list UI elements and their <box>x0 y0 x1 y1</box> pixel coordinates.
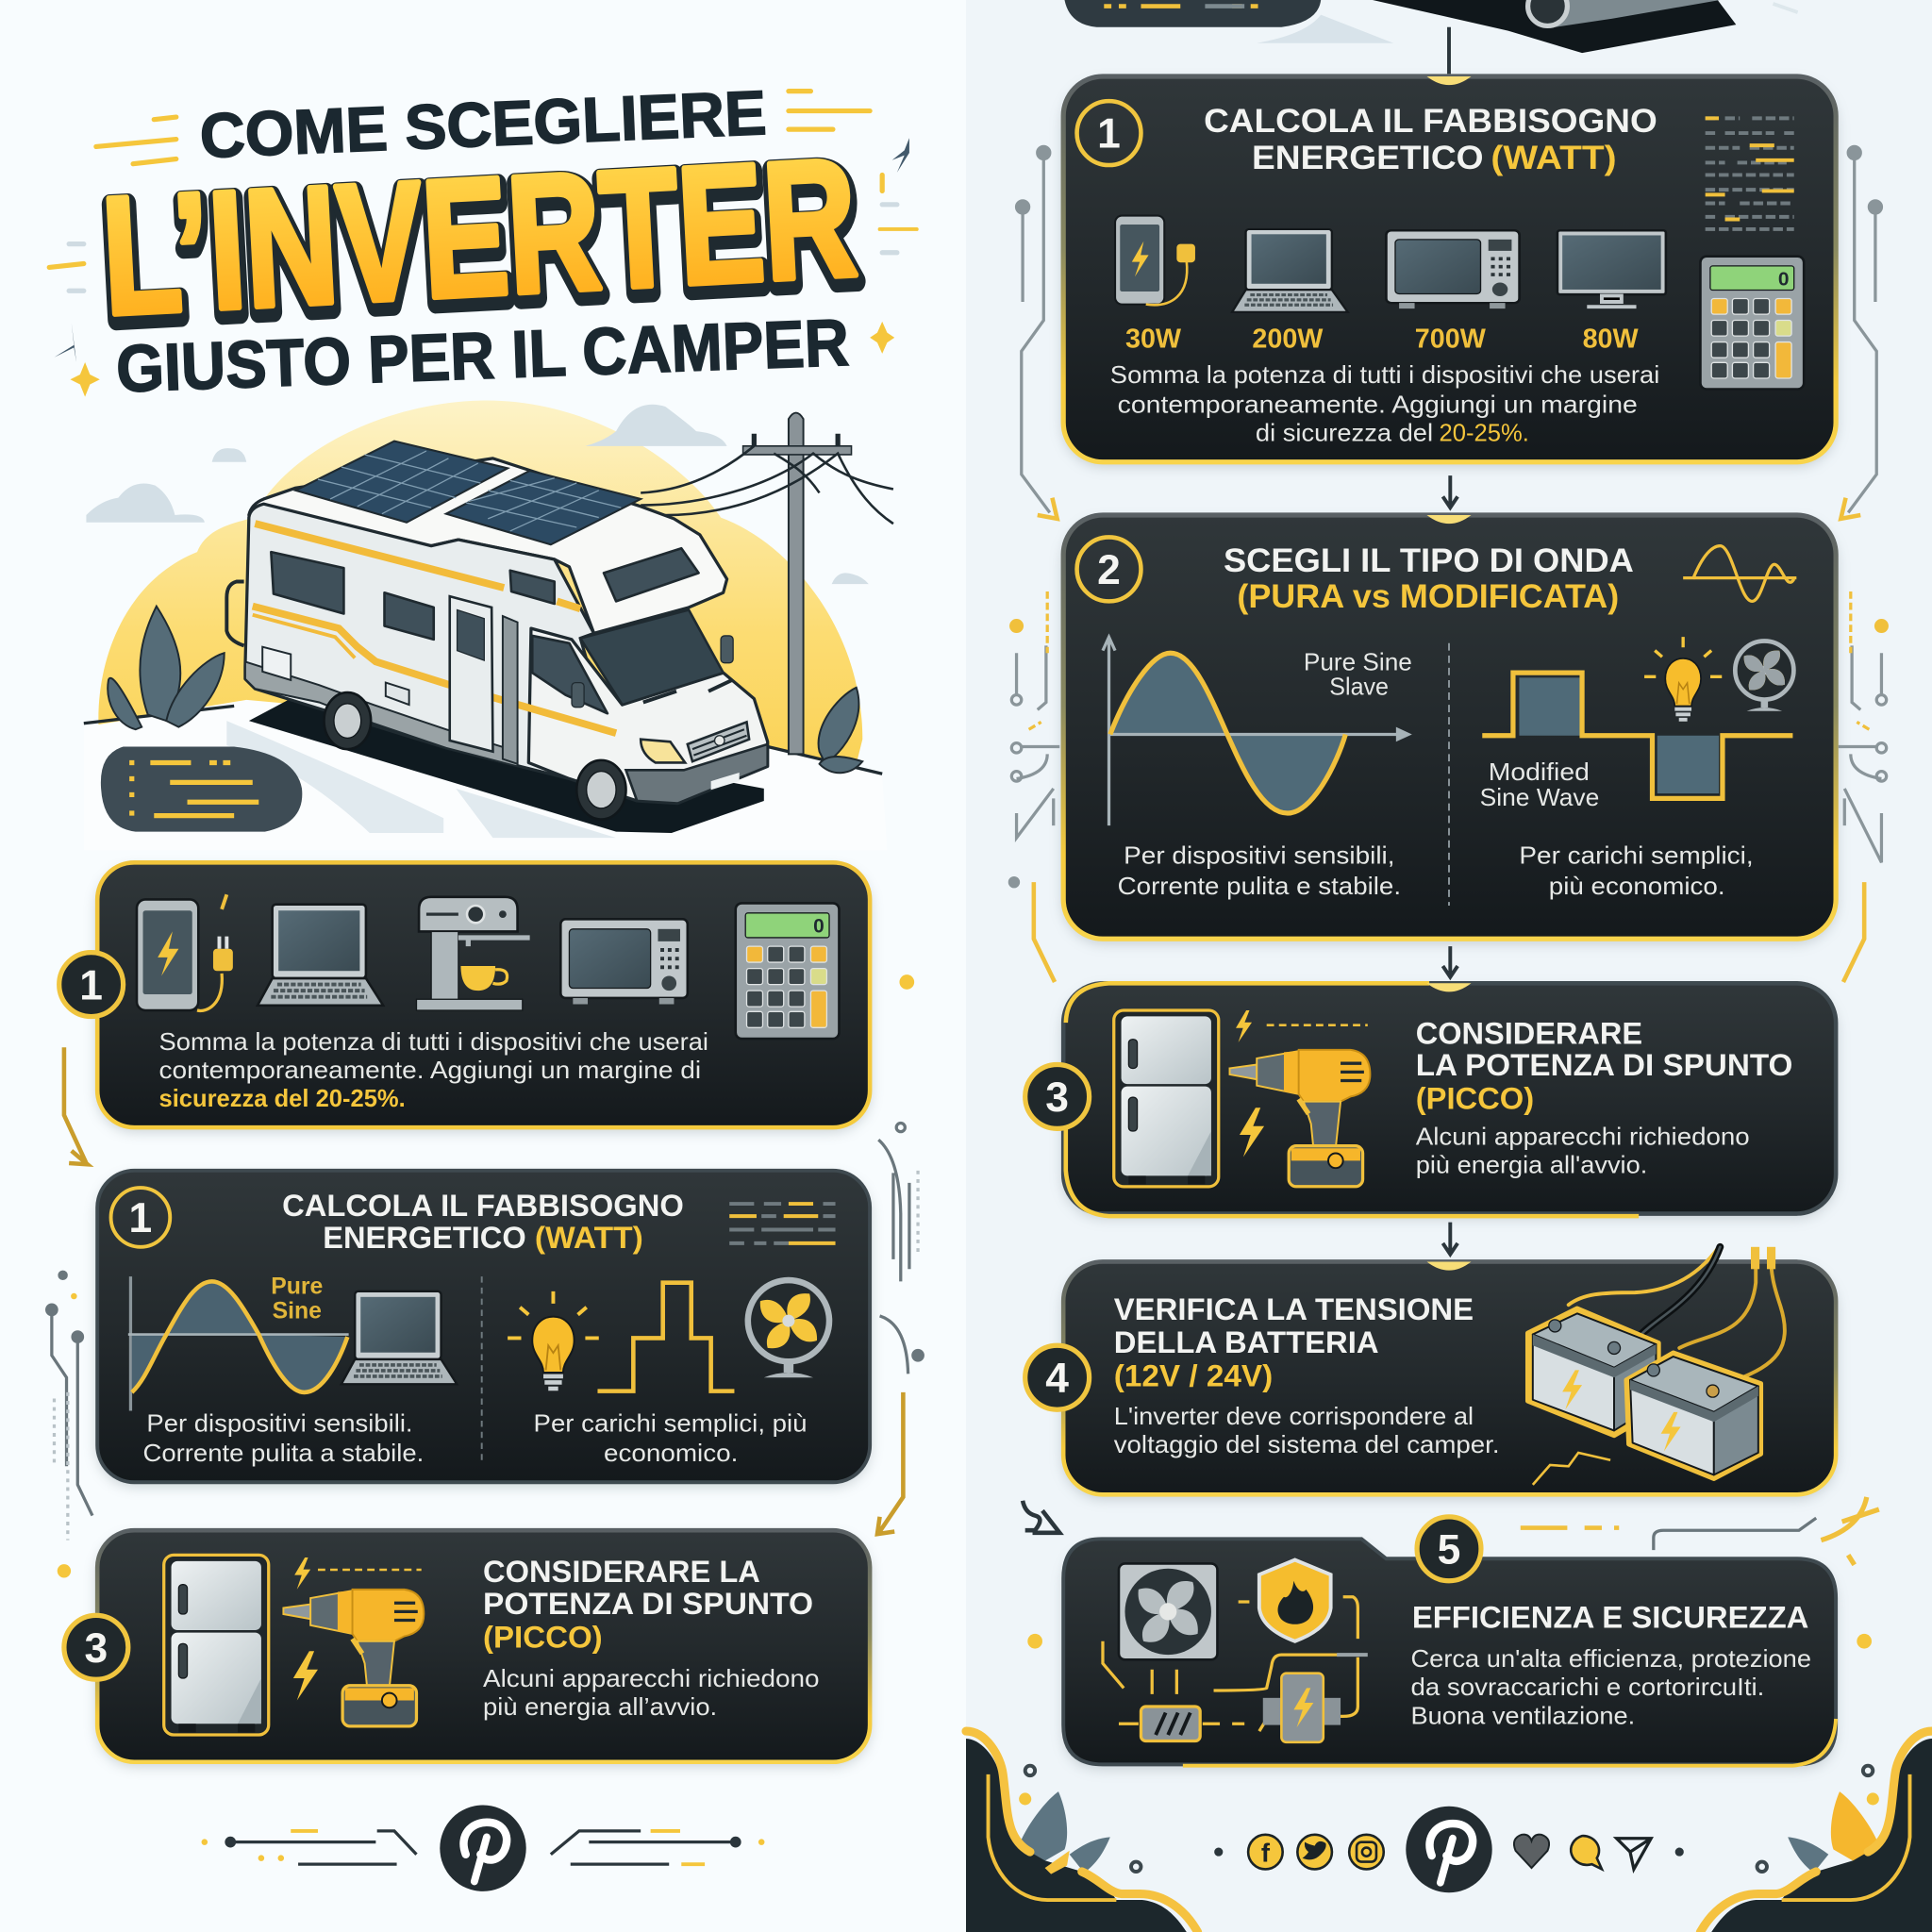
service hatch <box>262 647 291 680</box>
battery terminals <box>1549 1320 1719 1397</box>
action icons <box>1514 1835 1651 1869</box>
info bubble <box>101 747 302 832</box>
body text: contemporaneamente. Aggiungi un margine <box>1118 391 1638 419</box>
wattages: 80W <box>1583 324 1640 354</box>
badge 3: 3 <box>85 1625 108 1672</box>
body text: Alcuni apparecchi richiedono <box>483 1664 820 1692</box>
chart: pure sine <box>1103 637 1412 825</box>
windshield <box>580 610 724 705</box>
icon: microwave <box>1386 230 1520 308</box>
panel card <box>1062 983 1837 1219</box>
divider <box>1448 643 1450 906</box>
body text: sicurezza del 20-25%. <box>158 1084 406 1112</box>
captions: Per carichi semplici, <box>1519 841 1754 870</box>
cab <box>528 628 768 804</box>
icon: circuit wiring <box>1103 1597 1368 1731</box>
battery 1 <box>1528 1308 1658 1436</box>
outer yellow bands <box>966 1731 1198 1932</box>
top glow <box>1426 76 1472 85</box>
icon: bolts and dashes <box>1236 1010 1368 1157</box>
footer dots <box>202 1831 764 1864</box>
decorations above step 5 <box>1023 1497 1879 1565</box>
icon: fan box <box>1119 1563 1217 1659</box>
chart: modified sine <box>1482 673 1792 798</box>
icon: component with bolt <box>1263 1674 1341 1742</box>
heading <box>1114 1291 1474 1392</box>
body text: voltaggio del sistema del camper. <box>1114 1430 1500 1458</box>
inner yellow line <box>1782 1774 1909 1900</box>
icon: laptop small <box>341 1291 457 1384</box>
title line: giusto per il camper: GIUSTO PER IL CAMPER <box>115 305 850 406</box>
label: pure sine <box>271 1274 323 1324</box>
heading <box>282 1188 684 1255</box>
icon: shield with flame <box>1259 1560 1331 1641</box>
icon: microwave <box>560 919 688 1004</box>
camper body side <box>245 504 610 778</box>
label: modified sine wave: Modified <box>1489 758 1590 786</box>
icon: desk fan <box>1735 641 1793 711</box>
body text <box>1416 1122 1750 1178</box>
badge 3: 3 <box>1045 1074 1069 1121</box>
panel card <box>1062 76 1837 467</box>
captions: Corrente pulita a stabile. <box>143 1439 424 1467</box>
heading: ENERGETICO <box>323 1220 526 1255</box>
side arrow heads <box>1038 498 1860 519</box>
pinterest logo <box>1406 1807 1492 1892</box>
label: pure sine: Slave <box>1329 673 1389 701</box>
clouds <box>86 405 869 584</box>
lower skirt <box>245 661 518 766</box>
heading: POTENZA DI SPUNTO <box>483 1586 813 1621</box>
small hatch <box>386 683 409 705</box>
badge 3 <box>64 1615 128 1679</box>
body text: Buona ventilazione. <box>1411 1701 1635 1729</box>
title <box>98 78 862 406</box>
badge outlined 1: 1 <box>129 1195 152 1241</box>
heading: CONSIDERARE LA <box>483 1554 760 1589</box>
yellow edge <box>1066 983 1639 1216</box>
captions: Per carichi semplici, più <box>534 1409 808 1438</box>
badge 1: 1 <box>79 962 103 1008</box>
badge 4: 4 <box>1045 1356 1069 1402</box>
body text <box>1114 1402 1500 1458</box>
icon: laptop <box>1232 229 1348 312</box>
door <box>450 596 518 764</box>
heading: (WATT) <box>1491 140 1617 176</box>
dark shape <box>1711 1739 1932 1932</box>
battery cables <box>1569 1247 1785 1380</box>
code lines <box>1706 118 1794 229</box>
arrow: left down 1 <box>64 1047 88 1164</box>
dark shape <box>966 1739 1187 1932</box>
body text: 20-25%. <box>1440 419 1529 447</box>
icon: batteries and cables <box>1528 1247 1785 1485</box>
chart: stepped wave <box>597 1283 734 1391</box>
battery clamps <box>1751 1247 1775 1269</box>
footer lines <box>234 1831 740 1864</box>
heading: CALCOLA IL FABBISOGNO <box>1204 103 1657 140</box>
heading: SCEGLI IL TIPO DI ONDA <box>1224 542 1634 579</box>
wattages <box>1125 324 1640 354</box>
panel card <box>1063 1539 1836 1770</box>
icon: bulb <box>508 1291 599 1389</box>
rear ladder <box>226 581 244 645</box>
wheels <box>325 692 626 820</box>
heading: VERIFICA LA TENSIONE <box>1114 1291 1474 1326</box>
panel card <box>1062 1261 1837 1500</box>
yellow sun backdrop <box>98 400 862 789</box>
yellow bottom edge <box>1183 1719 1836 1766</box>
icon: fridge <box>164 1555 269 1735</box>
wattages: 200W <box>1252 324 1324 354</box>
body text: Somma la potenza di tutti i dispositivi che userai <box>1110 360 1659 389</box>
icon: phone <box>1115 216 1195 305</box>
battery bolts <box>1562 1370 1582 1409</box>
badge outlined 1 <box>1077 101 1141 165</box>
icon: fridge <box>1114 1010 1219 1187</box>
panel: right step 4 <box>1025 1247 1837 1500</box>
badge outlined 2 <box>1077 537 1141 601</box>
continuation: illustration top of right page <box>1064 0 1798 53</box>
corner dots <box>1675 1766 1879 1872</box>
connector top <box>1447 27 1451 74</box>
code lines <box>729 1204 836 1243</box>
footer: left <box>202 1805 764 1891</box>
panel: right step 5 <box>1063 1517 1836 1770</box>
icon: calculator <box>736 903 839 1039</box>
connector 2 to 3 <box>1442 946 1457 977</box>
captions: più economico. <box>1549 872 1725 900</box>
heading: (12V / 24V) <box>1114 1357 1273 1392</box>
power pole <box>641 413 893 754</box>
top glow <box>1426 1261 1472 1271</box>
heading: (PICCO) <box>1416 1081 1534 1116</box>
connector 3 to 4 <box>1442 1223 1457 1255</box>
camper illustration <box>84 400 893 850</box>
heading <box>483 1554 813 1654</box>
mirror <box>572 683 584 708</box>
gray leaf <box>1788 1837 1828 1873</box>
yellow code lines <box>1706 118 1794 219</box>
icon: resistor <box>1119 1707 1220 1741</box>
body text: L'inverter deve corrispondere al <box>1114 1402 1474 1430</box>
label: pure sine: Sine <box>273 1299 322 1324</box>
grille and bumper <box>626 680 768 804</box>
label: pure sine <box>1304 648 1412 701</box>
badge 5: 5 <box>1438 1526 1460 1573</box>
heading: DELLA BATTERIA <box>1114 1324 1379 1359</box>
badge 5 <box>1417 1517 1481 1581</box>
heading <box>1224 542 1634 615</box>
panel: left starting power <box>64 1530 871 1767</box>
road <box>84 700 887 850</box>
body text: da sovraccarichi e cortorircuIti. <box>1411 1673 1764 1701</box>
body text: più energia all'avvio. <box>1416 1150 1647 1178</box>
camper shadow <box>249 700 764 833</box>
heading: ENERGETICO <box>1252 140 1484 176</box>
label: modified sine wave <box>1480 758 1599 811</box>
heading <box>1204 103 1657 176</box>
icon: phone and plug <box>137 894 233 1010</box>
panel card <box>96 862 871 1132</box>
small yellow leaf <box>1045 1851 1070 1874</box>
title line: come scegliere: COME SCEGLIERE <box>198 78 768 172</box>
left decoration dots <box>58 974 914 1577</box>
body text <box>158 1027 708 1112</box>
badge 3 <box>1025 1064 1090 1128</box>
icon: bulb <box>1644 637 1722 720</box>
left circuit decorations <box>47 1124 923 1541</box>
label: modified sine wave: Sine Wave <box>1480 783 1599 811</box>
road edge lines <box>84 706 882 774</box>
icon: small wave <box>1683 546 1796 601</box>
icon: fan <box>748 1280 829 1377</box>
body text <box>483 1664 820 1721</box>
social icons: f <box>1261 1839 1271 1868</box>
heading: (WATT) <box>535 1220 643 1255</box>
badge outlined 1 <box>111 1188 170 1247</box>
label: pure sine: Pure <box>271 1274 323 1299</box>
body text: più energia all’avvio. <box>483 1692 717 1721</box>
divider <box>481 1276 483 1464</box>
body text <box>1411 1644 1811 1729</box>
heading: (PURA vs MODIFICATA) <box>1237 578 1619 615</box>
title line: l'inverter outline: L’INVERTER <box>99 129 862 357</box>
body text: Somma la potenza di tutti i dispositivi che userai <box>158 1027 708 1056</box>
icon: coffee machine <box>416 897 530 1010</box>
label: pure sine: Pure Sine <box>1304 648 1412 676</box>
top glow <box>1426 983 1472 991</box>
panel: right step 1 <box>1062 76 1837 467</box>
heading: (PICCO) <box>483 1619 603 1654</box>
icon: bolts and dashes <box>293 1557 422 1700</box>
outer yellow bands <box>1700 1731 1932 1932</box>
solar panels <box>295 441 641 544</box>
side circuit decorations step 2 <box>1009 645 1887 887</box>
side dots step 5 <box>1027 1634 1872 1649</box>
battery 2 <box>1626 1353 1760 1478</box>
title accent dashes and sparkles <box>49 92 917 397</box>
body text: Cerca un'alta efficienza, protezione <box>1411 1644 1811 1673</box>
right mirror <box>721 636 733 663</box>
captions: Corrente pulita e stabile. <box>1118 872 1401 900</box>
body text <box>1110 360 1659 447</box>
wattages: 30W <box>1125 324 1182 354</box>
windows <box>271 548 699 713</box>
body text: Alcuni apparecchi richiedono <box>1416 1122 1750 1150</box>
heading: EFFICIENZA E SICUREZZA <box>1412 1599 1808 1634</box>
background: right page <box>966 0 1932 1932</box>
connector 1 to 2 <box>1442 475 1457 508</box>
footer: right <box>1248 1807 1651 1892</box>
captions: Per dispositivi sensibili, <box>1124 841 1395 870</box>
heading <box>1416 1015 1792 1116</box>
spark line <box>1533 1453 1610 1485</box>
panel: left wave comparison <box>96 1171 871 1487</box>
yellow side details step 2 <box>1011 591 1887 982</box>
body text: contemporaneamente. Aggiungi un margine di <box>158 1056 701 1084</box>
yellow stripes <box>253 524 616 733</box>
leaves <box>1831 1791 1876 1863</box>
heading: LA POTENZA DI SPUNTO <box>1416 1047 1792 1082</box>
panel: left energy devices <box>59 862 871 1132</box>
captions: economico. <box>604 1439 738 1467</box>
leaves <box>1022 1791 1110 1873</box>
top glow <box>1426 515 1472 524</box>
chart: pure sine <box>128 1276 349 1411</box>
social icons <box>1248 1835 1384 1869</box>
side circuit lines step 1 <box>1017 146 1881 512</box>
pinterest logo <box>440 1805 526 1891</box>
road shading <box>226 721 616 838</box>
captions <box>143 1409 808 1467</box>
icon: calculator <box>1700 257 1804 389</box>
panel card <box>96 1530 871 1767</box>
panel: right step 3 <box>1025 983 1837 1219</box>
body text: di sicurezza del <box>1256 419 1433 447</box>
arrow: left down 2 <box>877 1392 903 1534</box>
badge 1 <box>59 953 124 1017</box>
corner ornament: bottom right <box>1675 1731 1932 1932</box>
captions: Per dispositivi sensibili. <box>146 1409 413 1438</box>
badge 4 <box>1025 1345 1090 1409</box>
corner ornament: bottom left <box>966 1731 1223 1932</box>
badge outlined 1: 1 <box>1097 111 1121 158</box>
background: left page <box>0 0 966 1932</box>
corner dots <box>1019 1766 1223 1872</box>
wattages: 700W <box>1415 324 1487 354</box>
panel card <box>96 1171 871 1487</box>
yellow code lines <box>729 1204 836 1243</box>
inner yellow line <box>989 1774 1116 1900</box>
heading: CONSIDERARE <box>1416 1015 1642 1050</box>
badge outlined 2: 2 <box>1097 547 1121 593</box>
roof and overcab top <box>249 458 727 633</box>
icon: drill <box>283 1590 424 1726</box>
plants <box>108 607 862 773</box>
heading: CALCOLA IL FABBISOGNO <box>282 1188 684 1223</box>
panel card <box>1062 515 1837 943</box>
title line: l'inverter: L’INVERTER <box>98 123 861 350</box>
panel: right step 2 <box>1062 515 1837 943</box>
icon: laptop <box>258 905 383 1006</box>
icon: drill <box>1230 1050 1370 1187</box>
captions <box>1118 841 1754 900</box>
icon: tv <box>1557 230 1666 307</box>
